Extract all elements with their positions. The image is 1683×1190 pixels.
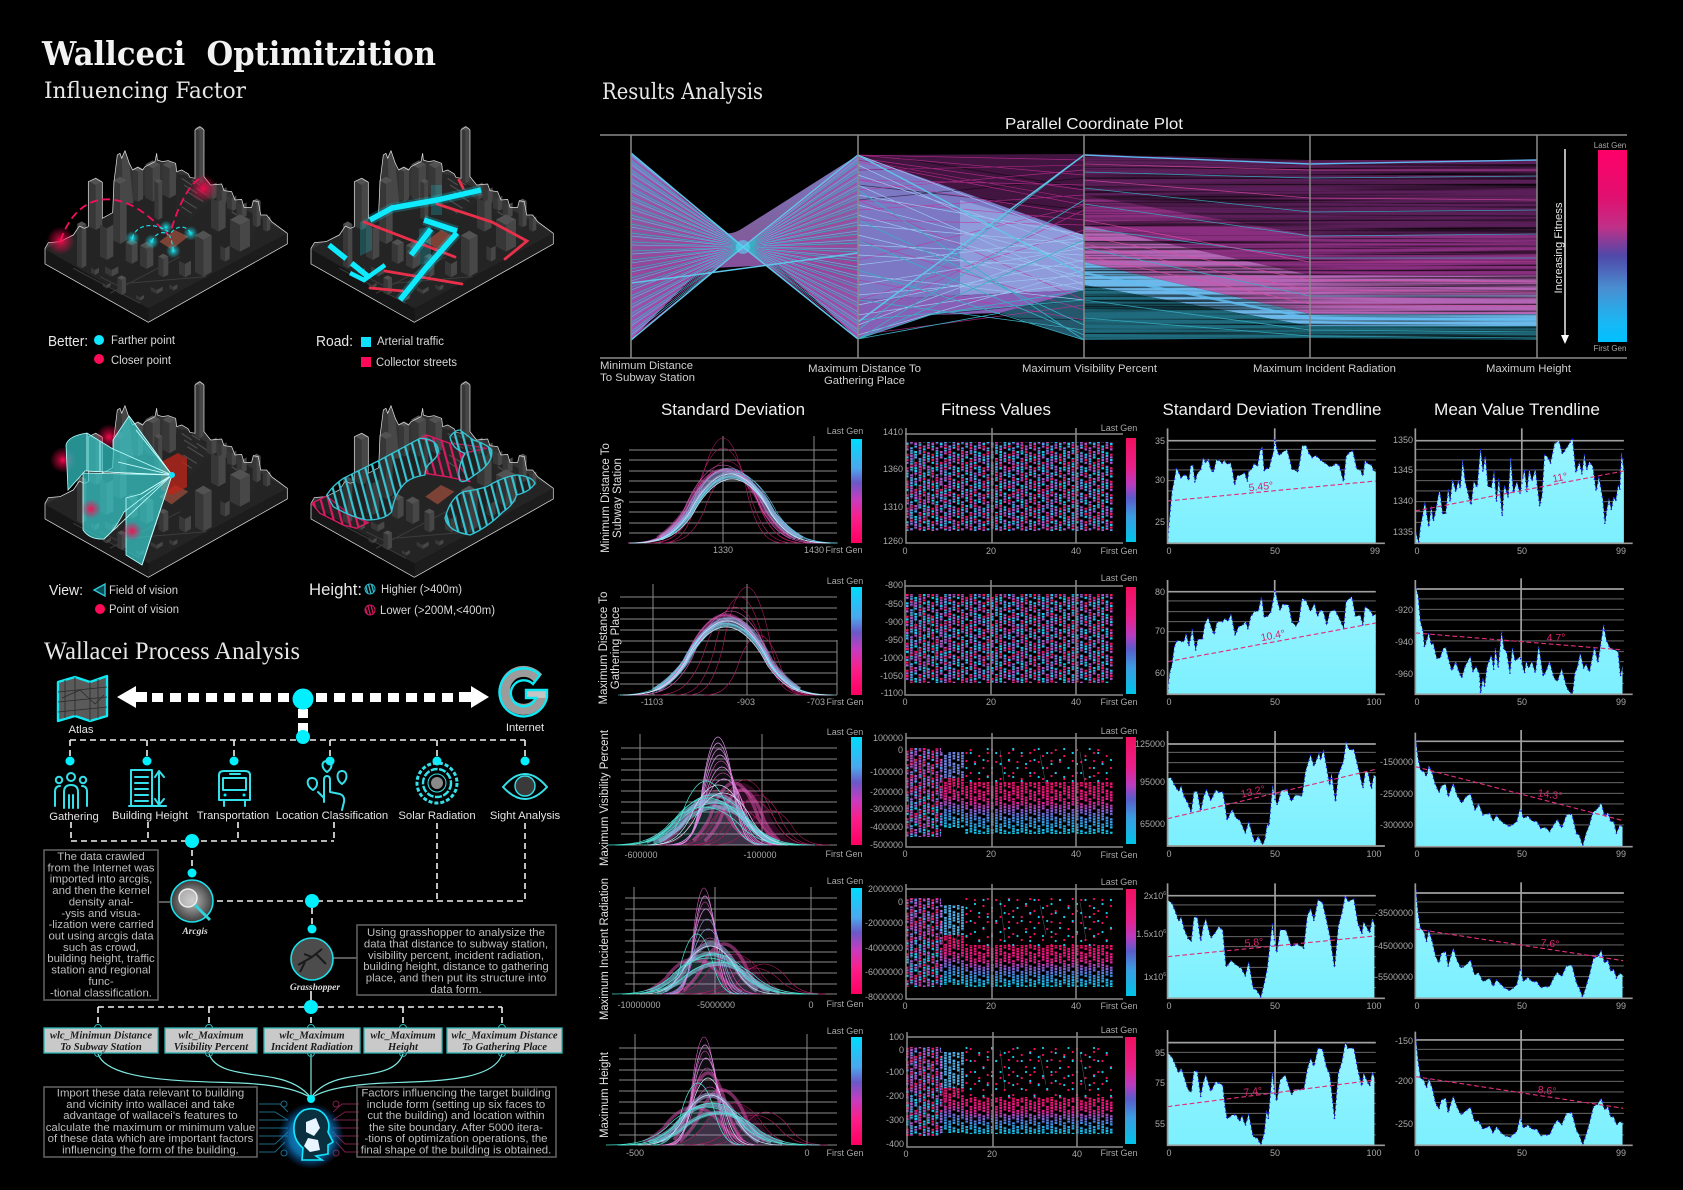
chart: mean value trendline row 3: -300000 (1380, 820, 1413, 830)
chart: fitness maximum visibility percent: 20 (986, 849, 996, 859)
row labels: Subway Station (612, 458, 624, 538)
chart: fitness minimum distance to subway station: 0 (902, 546, 908, 556)
text box: arcgis description: density anal- (69, 896, 133, 908)
column headings: Standard Deviation Trendline (1162, 400, 1382, 419)
chart: standard deviation trendline row 1: 50 (1270, 546, 1280, 556)
chart: standard deviation trendline row 2: 80 (1155, 587, 1165, 597)
row labels: Maximum Height (599, 1051, 611, 1138)
text box: arcgis description: out using arcgis data (48, 930, 154, 942)
axis labels: Gathering Place (824, 375, 905, 387)
chart: fitness maximum visibility percent: -100000 (870, 767, 903, 777)
chart: mean value trendline row 4: -3500000 (1375, 908, 1413, 918)
title: Wallceci Optimitzition (41, 34, 436, 73)
chart: mean value trendline row 4: 0 (1414, 1001, 1420, 1011)
chart: mean value trendline row 5 (1395, 1030, 1633, 1158)
icon: transportation (197, 771, 269, 822)
chart: standard deviation maximum height: 0 (804, 1148, 810, 1158)
row labels: Maximum Visibility Percent (599, 729, 611, 866)
chart: standard deviation maximum incident radiation: -5000000 (697, 1000, 735, 1010)
text box: wallacei import description: influencing the form of the building. (62, 1144, 239, 1156)
plot title: Parallel Coordinate Plot (1005, 116, 1184, 133)
chart: standard deviation maximum distance to gathering place: -903 (737, 697, 755, 707)
legend: view: Point of vision (109, 604, 179, 616)
chart: standard deviation minimum distance to subway station: First Gen (825, 545, 863, 555)
chart: standard deviation maximum incident radiation: -10000000 (617, 1000, 661, 1010)
chart: fitness maximum height: Last Gen (1101, 1025, 1137, 1035)
chart: mean value trendline row 2: -960 (1395, 669, 1413, 679)
chart: standard deviation trendline row 4: 100 (1366, 1001, 1382, 1011)
chart: mean value trendline row 3: -150000 (1380, 757, 1413, 767)
text box: arcgis description: such as crowd, (63, 942, 139, 954)
text box: target building factors: final shape of the building is obtained. (361, 1144, 551, 1156)
colour legend (1594, 141, 1627, 353)
chart: standard deviation minimum distance to subway station (628, 426, 863, 555)
icon: grasshopper (290, 938, 340, 993)
chart: mean value trendline row 5: -150 (1395, 1036, 1413, 1046)
chart: fitness maximum incident radiation: First Gen (1100, 1001, 1138, 1011)
chart: fitness maximum distance to gathering place: 40 (1071, 697, 1081, 707)
icon: circuit head wallacei (259, 1101, 359, 1169)
chart: fitness maximum visibility percent: 40 (1071, 849, 1081, 859)
chart: standard deviation trendline row 3: 125000 (1135, 739, 1165, 749)
chart: standard deviation trendline row 4: 0 (1166, 1001, 1172, 1011)
chart: fitness maximum visibility percent: -300000 (870, 804, 903, 814)
text box: arcgis description: -tional classification. (50, 987, 152, 999)
heading: results analysis: Results Analysis (602, 80, 763, 105)
chart: fitness maximum height: -200 (886, 1091, 904, 1101)
parallel coordinate plot (600, 116, 1627, 387)
icon: gathering: Gathering (49, 811, 99, 823)
panel: height city map (311, 381, 553, 577)
chart: mean value trendline row 4: -4500000 (1375, 941, 1413, 951)
chart: standard deviation maximum distance to gathering place (618, 576, 864, 707)
chart: mean value trendline row 1: 0 (1414, 546, 1420, 556)
chart: fitness maximum visibility percent (870, 726, 1138, 860)
chart: fitness maximum visibility percent: -200000 (870, 787, 903, 797)
text box: arcgis description: building height, traffic (47, 953, 155, 965)
chart: standard deviation trendline row 1: 30 (1155, 475, 1165, 485)
chart: fitness maximum distance to gathering place: -1100 (881, 688, 903, 698)
heading: influencing factor: Influencing Factor (44, 79, 246, 104)
chart: fitness maximum incident radiation: 0 (898, 897, 903, 907)
chart: fitness minimum distance to subway station: 1410 (883, 427, 903, 437)
chart: standard deviation trendline row 3 (1135, 731, 1385, 859)
chart: standard deviation maximum visibility percent: Last Gen (827, 727, 863, 737)
chart: fitness maximum distance to gathering place: -850 (885, 599, 903, 609)
legend: view: Field of vision (109, 585, 178, 597)
chart: fitness minimum distance to subway station: 1310 (883, 502, 903, 512)
chart: mean value trendline row 4: 99 (1616, 1001, 1626, 1011)
chart: standard deviation trendline row 2 (1155, 580, 1385, 707)
chart: fitness maximum visibility percent: -500000 (870, 840, 903, 850)
data field boxes: Height (387, 1042, 419, 1053)
icon: atlas map (58, 676, 107, 736)
chart: mean value trendline row 2 (1395, 578, 1633, 707)
text box: arcgis description: imported into arcgis, (50, 874, 152, 886)
text box: grasshopper description: data form. (430, 984, 482, 996)
row labels: Minimum Distance To (600, 443, 612, 553)
chart: standard deviation trendline row 1: 25 (1155, 517, 1165, 527)
chart: standard deviation trendline row 2: 60 (1155, 668, 1165, 678)
chart: fitness minimum distance to subway station: 1260 (883, 536, 903, 546)
chart: fitness maximum distance to gathering place: 20 (986, 697, 996, 707)
chart: fitness maximum visibility percent: Last Gen (1101, 726, 1137, 736)
chart: fitness maximum height: -100 (886, 1067, 904, 1077)
chart: fitness maximum distance to gathering place: -950 (885, 635, 903, 645)
chart: standard deviation maximum height (606, 1026, 864, 1158)
text box: arcgis description (44, 850, 158, 1000)
fitness arrow (1553, 149, 1569, 344)
icon: sight analysis: Sight Analysis (490, 810, 561, 822)
text box: grasshopper description: place, and then put its structure into (366, 972, 546, 984)
axis labels: To Subway Station (600, 372, 695, 384)
chart: standard deviation maximum distance to gathering place: -1103 (641, 697, 663, 707)
chart: fitness maximum distance to gathering place: -1000 (880, 653, 903, 663)
chart: fitness minimum distance to subway station (883, 423, 1138, 556)
chart: fitness maximum distance to gathering place (880, 573, 1138, 707)
chart: standard deviation trendline row 5: 100 (1366, 1148, 1382, 1158)
chart: standard deviation maximum distance to gathering place: Last Gen (827, 576, 863, 586)
panel: better distance city map (45, 126, 287, 322)
text box: target building factors: the site boundary. After 5000 itera- (369, 1122, 543, 1134)
icon: transportation: Transportation (197, 810, 269, 822)
chart: standard deviation trendline row 5: 50 (1270, 1148, 1280, 1158)
chart: fitness maximum incident radiation: 20 (986, 1001, 996, 1011)
chart: fitness maximum incident radiation: 40 (1071, 1001, 1081, 1011)
chart: fitness maximum distance to gathering place: First Gen (1100, 697, 1138, 707)
chart: standard deviation trendline row 3: 13.2° (1240, 783, 1266, 801)
chart: fitness maximum incident radiation: -2000000 (865, 918, 903, 928)
chart: mean value trendline row 2: 50 (1517, 697, 1527, 707)
chart: fitness maximum visibility percent: -400000 (870, 822, 903, 832)
legend: height: Lower (>200M,<400m) (380, 605, 495, 617)
data field boxes: wlc_Maximum (370, 1030, 436, 1042)
legend: road: Road: (316, 333, 353, 350)
data field boxes: To Subway Station (60, 1042, 142, 1053)
chart: mean value trendline row 3: 14.3° (1537, 787, 1563, 803)
chart: mean value trendline row 2: 0 (1414, 697, 1420, 707)
chart: fitness maximum height: 100 (889, 1032, 904, 1042)
icon: internet G logo: Internet (506, 722, 545, 734)
legend: road: Arterial traffic (377, 336, 444, 348)
chart: fitness maximum incident radiation: 2000000 (868, 884, 903, 894)
chart: standard deviation trendline row 1: 35 (1155, 436, 1165, 446)
data field boxes: wlc_Maximum (279, 1030, 345, 1042)
axis labels: Minimum Distance (600, 360, 693, 372)
chart: standard deviation maximum visibility percent: -100000 (743, 850, 777, 860)
text box: target building factors (357, 1087, 556, 1157)
data field boxes: To Gathering Place (462, 1042, 547, 1053)
chart: fitness maximum height: 40 (1072, 1149, 1082, 1159)
heading: wallacei process analysis: Wallacei Process Analysis (44, 638, 300, 665)
axis labels (600, 360, 1571, 387)
chart: fitness minimum distance to subway station: Last Gen (1101, 423, 1137, 433)
text box: target building factors: include form (setting up six faces to (367, 1099, 545, 1111)
chart: mean value trendline row 1: 99 (1616, 546, 1626, 556)
chart: standard deviation trendline row 1: 99 (1370, 546, 1380, 556)
chart: standard deviation maximum visibility percent (608, 727, 863, 860)
row labels (598, 443, 624, 1138)
chart: standard deviation trendline row 4: 6 (1163, 891, 1166, 897)
chart: standard deviation minimum distance to subway station: 1330 (713, 545, 733, 555)
text box: arcgis description: and then the kernel (52, 885, 150, 897)
node dots (66, 688, 530, 1103)
chart: standard deviation trendline row 2: 70 (1155, 626, 1165, 636)
chart: fitness maximum incident radiation: -6000000 (865, 967, 903, 977)
chart: fitness maximum height: First Gen (1100, 1148, 1138, 1158)
column headings: Fitness Values (941, 400, 1051, 419)
chart: fitness maximum visibility percent: First Gen (1100, 850, 1138, 860)
legend: better (48, 333, 176, 367)
text box: arcgis description: func- (88, 976, 114, 988)
chart: standard deviation maximum incident radiation: First Gen (826, 999, 864, 1009)
row labels: Maximum Distance To (598, 592, 610, 704)
text box: arcgis description: station and regional (51, 964, 151, 976)
chart: standard deviation trendline row 5: 95 (1155, 1048, 1165, 1058)
chart: mean value trendline row 3: -250000 (1380, 789, 1413, 799)
column headings (661, 400, 1600, 419)
chart: standard deviation trendline row 4: 1.5x10 (1136, 929, 1163, 939)
chart: standard deviation maximum distance to gathering place: First Gen (826, 697, 864, 707)
row labels: Maximum Incident Radiation (599, 878, 611, 1020)
chart: fitness minimum distance to subway station: 20 (986, 546, 996, 556)
panel: view city map (45, 381, 287, 577)
chart: standard deviation minimum distance to subway station: 1430 (804, 545, 824, 555)
chart: mean value trendline row 5: -200 (1395, 1076, 1413, 1086)
column headings: Mean Value Trendline (1434, 400, 1600, 419)
text box: grasshopper description: building height, distance to gathering (363, 961, 549, 973)
chart: standard deviation maximum distance to gathering place: -703 (807, 697, 825, 707)
chart: standard deviation trendline row 2: 10.4° (1260, 628, 1286, 644)
data field boxes: Visibility Percent (174, 1042, 249, 1053)
arrow: double-headed data source arrow (117, 686, 489, 733)
colour legend: First Gen (1594, 344, 1626, 353)
text box: wallacei import description: of these data which are important factors (48, 1133, 254, 1145)
chart: standard deviation trendline row 3: 65000 (1140, 819, 1165, 829)
chart: fitness maximum visibility percent: 0 (898, 745, 903, 755)
chart: fitness minimum distance to subway station: 1360 (883, 464, 903, 474)
chart: fitness maximum visibility percent: 100000 (873, 733, 903, 743)
chart: standard deviation maximum height: Last Gen (827, 1026, 863, 1036)
chart: fitness maximum incident radiation: Last Gen (1101, 877, 1137, 887)
chart: fitness maximum height: -300 (886, 1115, 904, 1125)
chart: standard deviation trendline row 3: 100 (1366, 849, 1382, 859)
chart: standard deviation maximum incident radiation: Last Gen (827, 876, 863, 886)
chart: mean value trendline row 2: -920 (1395, 605, 1413, 615)
chart: standard deviation trendline row 1: 0 (1166, 546, 1172, 556)
chart: standard deviation trendline row 1 (1155, 428, 1385, 556)
chart: standard deviation trendline row 3: 50 (1270, 849, 1280, 859)
chart: standard deviation maximum visibility percent: -600000 (624, 850, 658, 860)
chart: fitness minimum distance to subway station: First Gen (1100, 546, 1138, 556)
chart: standard deviation trendline row 3: 95000 (1140, 777, 1165, 787)
chart: fitness maximum height: -400 (886, 1139, 904, 1149)
text box: target building factors: cut the building) and location within (367, 1110, 545, 1122)
legend: better: Better: (48, 333, 88, 350)
icon: arcgis: Arcgis (181, 927, 208, 937)
chart: mean value trendline row 2: 4.7° (1547, 632, 1565, 644)
icon: location classification (276, 761, 388, 822)
text box: arcgis description: -ysis and visua- (61, 908, 141, 920)
chart: fitness maximum distance to gathering place: -900 (885, 617, 903, 627)
chart: standard deviation trendline row 5: 55 (1155, 1119, 1165, 1129)
chart: mean value trendline row 4 (1375, 882, 1633, 1011)
legend: road: Collector streets (376, 357, 457, 369)
chart: fitness maximum incident radiation (865, 877, 1138, 1011)
legend: better: Closer point (111, 355, 172, 367)
chart: standard deviation trendline row 4: 50 (1270, 1001, 1280, 1011)
chart: mean value trendline row 5: 8.6° (1537, 1084, 1557, 1098)
chart: fitness maximum incident radiation: -8000000 (865, 992, 903, 1002)
chart: standard deviation maximum visibility percent: First Gen (825, 849, 863, 859)
text box: grasshopper description: visibility percent, incident radiation, (368, 950, 544, 962)
chart: standard deviation trendline row 4: 2x10 (1144, 891, 1163, 901)
chart: standard deviation minimum distance to subway station: Last Gen (827, 426, 863, 436)
flowchart connectors (70, 740, 525, 1098)
chart: mean value trendline row 1: 1340 (1393, 496, 1413, 506)
chart: fitness maximum distance to gathering place: 0 (902, 697, 908, 707)
colour legend: Last Gen (1594, 141, 1626, 150)
axis labels: Maximum Incident Radiation (1253, 363, 1396, 375)
data field boxes (44, 1024, 562, 1056)
text box: wallacei import description (44, 1087, 257, 1157)
icon: solar radiation (398, 763, 476, 822)
legend: height: Height: (309, 580, 362, 599)
panel: road city map (311, 126, 553, 322)
chart: standard deviation maximum incident radiation (612, 876, 864, 1010)
chart: fitness minimum distance to subway station: 40 (1071, 546, 1081, 556)
text box: target building factors: Factors influencing the target building (361, 1088, 551, 1100)
chart: standard deviation trendline row 2: 50 (1270, 697, 1280, 707)
chart: mean value trendline row 1: 1335 (1393, 527, 1413, 537)
legend: better: Farther point (111, 335, 176, 347)
icon: atlas map: Atlas (68, 724, 94, 736)
chart: mean value trendline row 5: 99 (1616, 1148, 1626, 1158)
icon: arcgis (171, 880, 213, 937)
chart: mean value trendline row 1: 11° (1551, 471, 1569, 485)
chart: mean value trendline row 5: 50 (1517, 1148, 1527, 1158)
icon: building height: Building Height (112, 810, 189, 822)
chart: fitness maximum height: 20 (987, 1149, 997, 1159)
legend: view: View: (49, 582, 83, 599)
chart: standard deviation trendline row 5: 7.4° (1243, 1085, 1263, 1099)
text box: grasshopper description (357, 925, 556, 996)
chart: standard deviation trendline row 1: 5.45° (1248, 480, 1274, 494)
icon: solar radiation: Solar Radiation (398, 810, 476, 822)
chart: mean value trendline row 1: 50 (1517, 546, 1527, 556)
icon: location classification: Location Classification (276, 810, 388, 822)
text box: grasshopper description: data that distance to subway station, (364, 938, 548, 950)
chart: standard deviation trendline row 5: 0 (1166, 1148, 1172, 1158)
chart: mean value trendline row 3 (1380, 730, 1633, 859)
chart: fitness maximum height: 0 (903, 1149, 909, 1159)
fitness arrow: Increasing Fitness (1553, 202, 1565, 293)
chart: mean value trendline row 3: 0 (1414, 849, 1420, 859)
chart: fitness maximum height: 0 (899, 1045, 904, 1055)
chart: fitness maximum height (886, 1025, 1138, 1159)
chart: mean value trendline row 5: 0 (1414, 1148, 1420, 1158)
chart: mean value trendline row 4: 50 (1517, 1001, 1527, 1011)
text box: wallacei import description: and vicinity into wallacei and take (66, 1099, 235, 1111)
legend: road (316, 333, 457, 369)
chart: mean value trendline row 1: 1345 (1393, 465, 1413, 475)
icon: gathering (49, 773, 99, 823)
chart: standard deviation maximum height: First Gen (826, 1148, 864, 1158)
legend: height: Highier (>400m) (381, 584, 462, 596)
data field boxes: wlc_Maximum Distance (451, 1030, 558, 1042)
chart: standard deviation maximum height: -500 (626, 1148, 644, 1158)
data field boxes: Incident Radiation (270, 1042, 353, 1053)
data field boxes: wlc_Maximum (178, 1030, 244, 1042)
chart: standard deviation trendline row 4: 6 (1163, 972, 1166, 978)
text box: wallacei import description: Import these data relevant to building (57, 1088, 244, 1100)
icon: grasshopper: Grasshopper (290, 983, 340, 993)
legend: height (309, 580, 495, 617)
chart: standard deviation trendline row 4 (1136, 883, 1385, 1011)
text box: arcgis description: The data crawled (57, 851, 145, 863)
chart: standard deviation trendline row 2: 100 (1366, 697, 1382, 707)
chart: mean value trendline row 2: -940 (1395, 637, 1413, 647)
text box: arcgis description: -lization were carried (48, 919, 154, 931)
chart: standard deviation trendline row 4: 1x10 (1144, 972, 1163, 982)
plot traces (631, 153, 1537, 340)
chart: standard deviation trendline row 3: 0 (1166, 849, 1172, 859)
icon: sight analysis (490, 774, 561, 822)
chart: mean value trendline row 3: 99 (1616, 849, 1626, 859)
chart: standard deviation trendline row 4: 5.8° (1244, 936, 1264, 950)
chart: fitness maximum incident radiation: -4000000 (865, 943, 903, 953)
chart: fitness maximum distance to gathering place: -1050 (880, 671, 903, 681)
legend: view (49, 582, 179, 616)
chart: mean value trendline row 4: -5500000 (1375, 972, 1413, 982)
chart: fitness maximum visibility percent: 0 (902, 849, 908, 859)
chart: fitness maximum incident radiation: 0 (902, 1001, 908, 1011)
chart: standard deviation trendline row 4: 6 (1163, 929, 1166, 935)
axis labels: Maximum Height (1486, 363, 1571, 375)
text box: wallacei import description: calculate the maximum or minimum value (46, 1122, 255, 1134)
text box: grasshopper description: Using grasshopper to analysize the (367, 927, 545, 939)
chart: mean value trendline row 1 (1393, 428, 1633, 556)
chart: mean value trendline row 4: 7.6° (1540, 937, 1560, 951)
chart: mean value trendline row 5: -250 (1395, 1119, 1413, 1129)
chart: mean value trendline row 2: 99 (1616, 697, 1626, 707)
axis labels: Maximum Visibility Percent (1022, 363, 1157, 375)
text box: wallacei import description: advantage of wallacei's features to (63, 1110, 238, 1122)
icon: internet G logo (499, 668, 547, 734)
plot axes (600, 135, 1627, 358)
chart: standard deviation trendline row 5 (1155, 1030, 1385, 1158)
chart: standard deviation trendline row 5: 75 (1155, 1078, 1165, 1088)
axis labels: Maximum Distance To (808, 363, 921, 375)
column headings: Standard Deviation (661, 400, 805, 419)
data field boxes: wlc_Minimun Distance (50, 1030, 152, 1042)
text box: target building factors: -tions of optimization operations, the (364, 1133, 548, 1145)
chart: mean value trendline row 1: 1350 (1393, 435, 1413, 445)
chart: mean value trendline row 3: 50 (1517, 849, 1527, 859)
chart: fitness maximum distance to gathering place: -800 (885, 580, 903, 590)
chart: standard deviation maximum incident radiation: 0 (808, 1000, 814, 1010)
icon: building height (112, 770, 189, 822)
text box: arcgis description: from the Internet was (48, 862, 155, 874)
row labels: Gathering Place (610, 607, 622, 689)
chart: fitness maximum distance to gathering place: Last Gen (1101, 573, 1137, 583)
chart: standard deviation trendline row 2: 0 (1166, 697, 1172, 707)
